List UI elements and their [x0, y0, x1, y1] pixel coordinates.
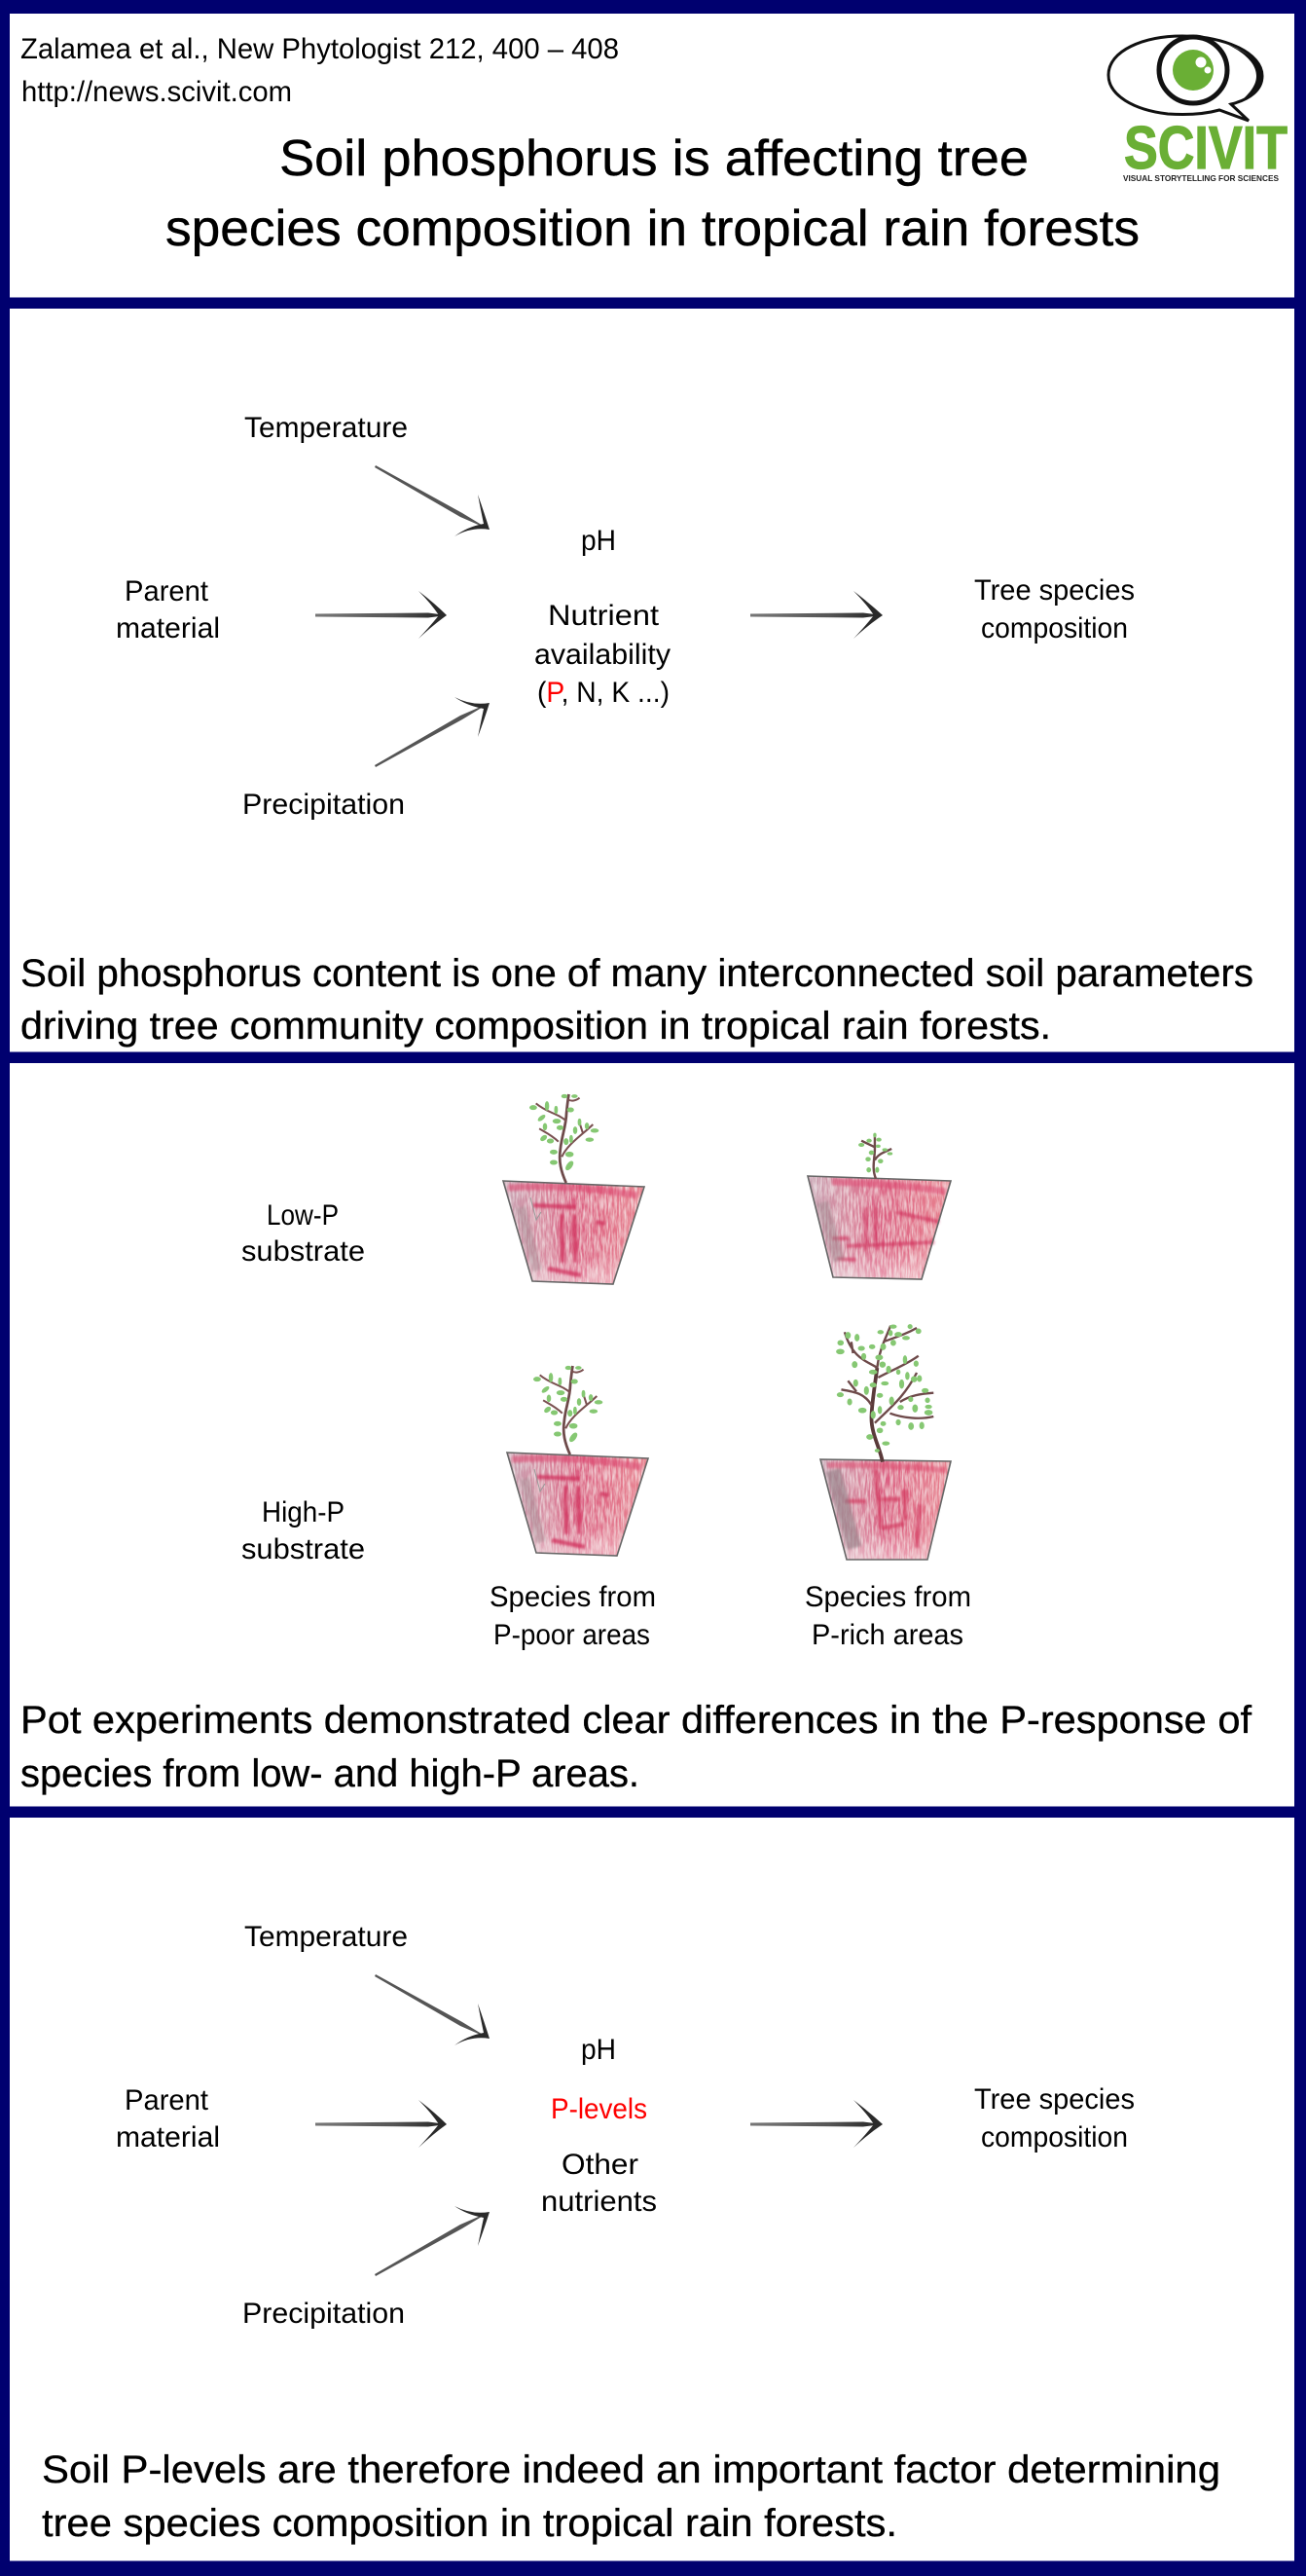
label: nutrient availability: (P, N, K ...) — [537, 677, 670, 709]
caption: pot experiments: Pot experiments demonstrated clear differences in the P-response of — [20, 1699, 1252, 1742]
label: low-P substrate — [241, 1199, 365, 1268]
label: parent material: material — [116, 2121, 220, 2153]
label: precipitation: Precipitation — [242, 2298, 405, 2330]
pot: P-rich species on high-P substrate — [820, 1325, 951, 1560]
label: parent material — [116, 575, 220, 644]
label: tree species composition: Tree species — [974, 2083, 1135, 2116]
label: species from P-rich areas: P-rich areas — [812, 1619, 963, 1651]
label: parent material: Parent — [125, 575, 209, 607]
website url: http://news.scivit.com — [21, 76, 292, 108]
panel: pot experiments — [10, 1063, 1294, 1807]
label: species from P-poor areas: Species from — [490, 1581, 656, 1613]
caption: pot experiments — [20, 1699, 1252, 1795]
label: parent material: Parent — [125, 2084, 209, 2116]
label: pH: pH — [581, 2034, 616, 2066]
caption: pot experiments: species from low- and high-P areas. — [20, 1752, 639, 1795]
label: species from P-poor areas: P-poor areas — [493, 1619, 650, 1651]
label: low-P substrate: substrate — [241, 1235, 365, 1268]
caption: conclusion: Soil P-levels are therefore indeed an important factor determining — [42, 2448, 1220, 2491]
icon: SciVit logo: VISUAL STORYTELLING FOR SCIENCES — [1123, 173, 1279, 183]
label: low-P substrate: Low-P — [267, 1199, 339, 1232]
arrow: soil to tree species — [750, 591, 883, 639]
arrow: temperature to soil — [375, 1974, 490, 2045]
label: tree species composition — [974, 2083, 1135, 2153]
caption: conclusion: tree species composition in tropical rain forests. — [42, 2502, 897, 2545]
panel: soil parameters diagram — [10, 309, 1294, 1052]
pot: P-poor species on high-P substrate — [507, 1366, 648, 1556]
label: pH: pH — [581, 525, 616, 557]
label: nutrient availability — [534, 600, 671, 709]
caption: conclusion — [42, 2448, 1220, 2545]
label: precipitation: Precipitation — [242, 789, 405, 821]
arrow: precipitation to soil — [375, 2206, 490, 2276]
caption: soil phosphorus: driving tree community composition in tropical rain forests. — [20, 1005, 1051, 1048]
label: other nutrients: Other — [562, 2149, 638, 2181]
pot: P-rich species on low-P substrate — [808, 1133, 951, 1279]
label: parent material — [116, 2084, 220, 2153]
citation: Zalamea et al., New Phytologist 212, 400 – 408 — [20, 33, 619, 65]
label: high-P substrate — [241, 1496, 365, 1565]
arrow: parent material to soil — [315, 2100, 447, 2148]
label: species from P-rich areas: Species from — [805, 1581, 971, 1613]
caption: soil phosphorus: Soil phosphorus content is one of many interconnected soil parameters — [20, 952, 1253, 995]
label: tree species composition: composition — [981, 2121, 1128, 2153]
caption: soil phosphorus — [20, 952, 1253, 1048]
label: other nutrients: nutrients — [541, 2186, 657, 2218]
panel: conclusion diagram — [10, 1818, 1294, 2561]
label: other nutrients — [541, 2149, 657, 2218]
label: nutrient availability: availability — [534, 639, 671, 671]
panel: header — [10, 14, 1294, 298]
label: tree species composition: composition — [981, 612, 1128, 644]
arrow: precipitation to soil — [375, 697, 490, 767]
label: high-P substrate: High-P — [262, 1496, 345, 1528]
label: tree species composition: Tree species — [974, 574, 1135, 607]
label: P-levels: P-levels — [551, 2093, 647, 2125]
arrow: temperature to soil — [375, 465, 490, 536]
title: Soil phosphorus is affecting tree — [279, 130, 1029, 187]
title — [165, 130, 1140, 257]
label: parent material: material — [116, 612, 220, 644]
label: species from P-poor areas — [490, 1581, 656, 1651]
label: tree species composition — [974, 574, 1135, 644]
pot: P-poor species on low-P substrate — [503, 1094, 644, 1284]
label: temperature: Temperature — [244, 1921, 408, 1953]
label: nutrient availability: Nutrient — [548, 600, 660, 632]
icon: SciVit logo — [1108, 36, 1288, 183]
label: temperature: Temperature — [244, 412, 408, 444]
label: high-P substrate: substrate — [241, 1533, 365, 1565]
title: species composition in tropical rain forests — [165, 201, 1140, 257]
label: species from P-rich areas — [805, 1581, 971, 1651]
arrow: parent material to soil — [315, 591, 447, 639]
arrow: soil to tree species — [750, 2100, 883, 2148]
